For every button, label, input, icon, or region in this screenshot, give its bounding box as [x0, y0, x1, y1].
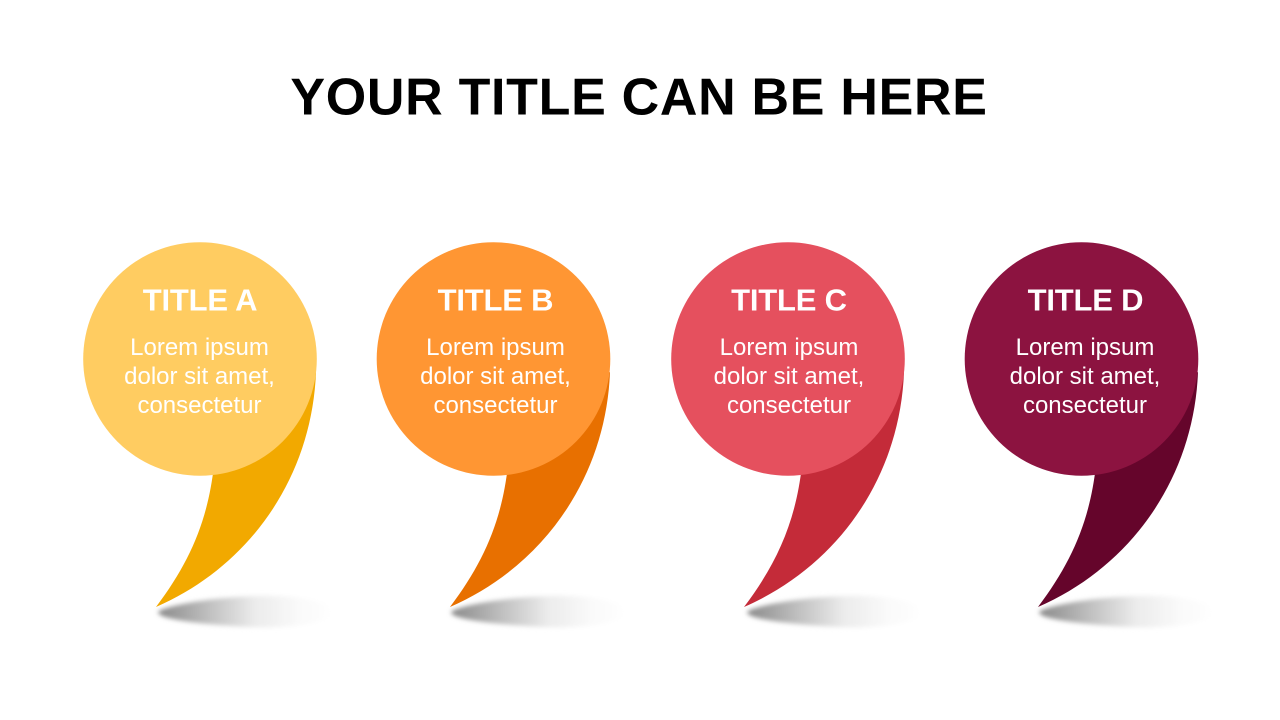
text B: consectetur	[433, 392, 558, 419]
heading A: TITLE A	[143, 282, 257, 318]
heading B: TITLE B	[438, 282, 553, 318]
tail D	[1038, 372, 1198, 607]
text A: consectetur	[137, 392, 262, 419]
circle D	[965, 242, 1198, 476]
circle A	[83, 242, 317, 476]
text C: Lorem ipsum	[720, 334, 858, 361]
text D: consectetur	[1023, 392, 1147, 419]
text D: dolor sit amet,	[1010, 363, 1160, 390]
text C: consectetur	[727, 392, 851, 419]
shadow A	[158, 596, 335, 627]
circle B	[377, 242, 610, 476]
shadow C	[747, 596, 924, 627]
shadow B	[451, 596, 628, 627]
panel: title D	[965, 242, 1216, 627]
tail B	[450, 372, 610, 607]
text C: dolor sit amet,	[714, 363, 864, 390]
panel: title C	[671, 242, 924, 627]
circle C	[671, 242, 905, 476]
text A: Lorem ipsum	[130, 334, 269, 361]
tail C	[744, 372, 904, 607]
text B: Lorem ipsum	[426, 334, 565, 361]
shadow D	[1039, 596, 1216, 627]
panel: title B	[377, 242, 628, 627]
title: YOUR TITLE CAN BE HERE	[290, 68, 988, 126]
panel: title A	[83, 242, 335, 627]
text B: dolor sit amet,	[420, 363, 571, 390]
text A: dolor sit amet,	[124, 363, 275, 390]
heading C: TITLE C	[731, 282, 847, 318]
heading D: TITLE D	[1028, 282, 1143, 318]
text D: Lorem ipsum	[1016, 334, 1154, 361]
tail A	[156, 372, 316, 607]
